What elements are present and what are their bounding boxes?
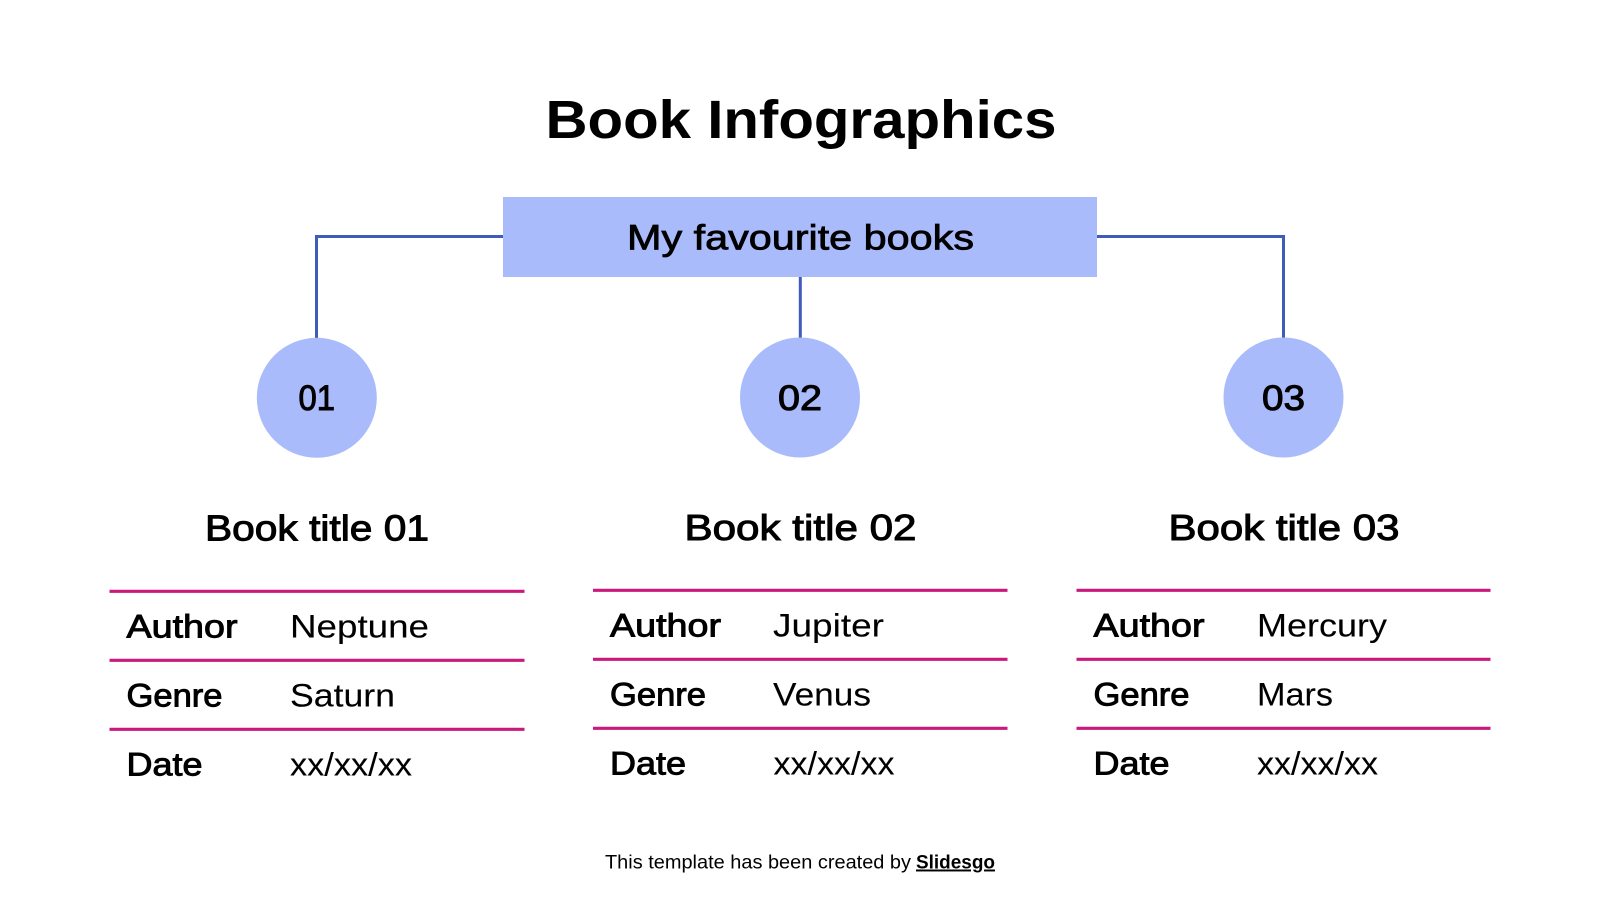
table rules 02 [593, 590, 1008, 728]
panel: book 02 [593, 507, 1008, 782]
number circle 02: 02 [778, 379, 822, 418]
row: genre: Genre [610, 676, 706, 712]
footer credit: Slidesgo [916, 852, 995, 874]
table rules 01 [110, 591, 524, 729]
header box: my favourite books [503, 197, 1097, 277]
connector: right [1097, 236, 1284, 338]
connector: center [799, 277, 802, 338]
row: author [1094, 608, 1387, 644]
row: author: Author [1094, 608, 1205, 644]
row: genre: Genre [1094, 676, 1190, 712]
row: genre: Mars [1257, 676, 1333, 712]
row: date: xx/xx/xx [774, 746, 894, 782]
number circle 02 [740, 338, 860, 458]
row: author: Jupiter [773, 608, 884, 644]
row: author [610, 608, 884, 644]
row: genre: Saturn [290, 678, 395, 714]
row: genre: Genre [126, 678, 222, 714]
book title 03: Book title 03 [1168, 507, 1400, 548]
row: author [126, 608, 429, 644]
row: date: Date [610, 746, 686, 782]
row: author: Neptune [290, 608, 429, 644]
row: date: xx/xx/xx [290, 746, 412, 782]
row: date: Date [1094, 746, 1170, 782]
table rules 03 [1076, 590, 1490, 728]
number circle 03: 03 [1262, 379, 1305, 418]
row: genre [610, 676, 871, 712]
row: genre [126, 678, 395, 714]
row: genre: Venus [773, 676, 871, 712]
row: date [126, 746, 412, 782]
number circle 03 [1224, 338, 1344, 458]
connector: left [316, 236, 503, 338]
row: date: xx/xx/xx [1257, 746, 1378, 782]
footer credit: This template has been created by [605, 852, 911, 874]
row: date [1094, 746, 1378, 782]
book title 01: Book title 01 [205, 508, 429, 548]
title: Book Infographics [546, 90, 1056, 150]
row: author: Author [610, 608, 721, 644]
number circle 01: 01 [298, 379, 335, 418]
number circle 01 [257, 338, 377, 458]
header box: my favourite books: My favourite books [627, 218, 974, 258]
row: date: Date [126, 746, 202, 782]
row: author: Mercury [1257, 608, 1387, 644]
panel: book 03 [1076, 507, 1490, 782]
book title 02: Book title 02 [684, 507, 916, 548]
panel: book 01 [110, 508, 524, 782]
row: author: Author [126, 608, 238, 644]
row: genre [1094, 676, 1333, 712]
row: date [610, 746, 894, 782]
